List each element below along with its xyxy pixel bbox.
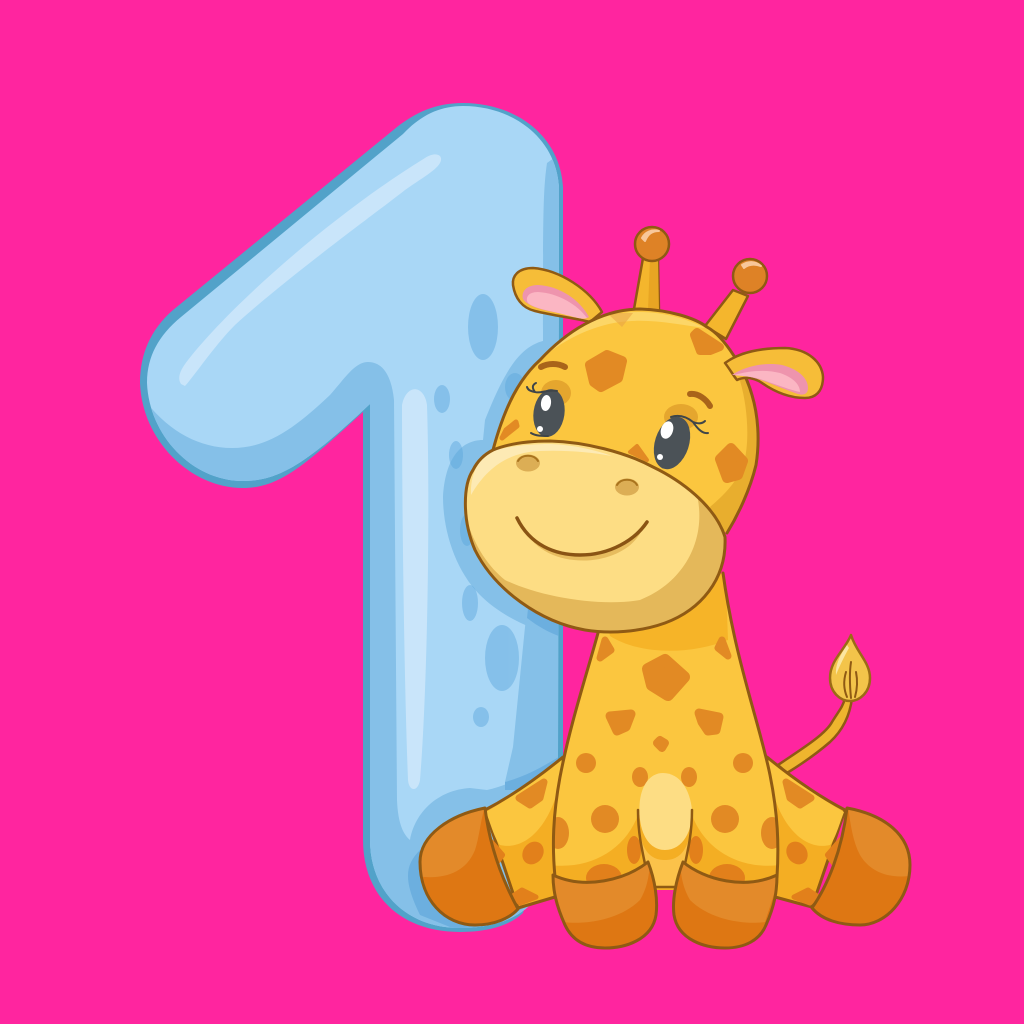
- body spots: [600, 640, 728, 748]
- front foot right: [672, 860, 778, 950]
- illustration: number one with baby giraffe: [140, 103, 912, 950]
- hoof right: [810, 806, 912, 926]
- body outline: [553, 573, 778, 877]
- muzzle: [464, 440, 727, 634]
- horn left: [634, 227, 669, 311]
- eyebrows: [541, 364, 565, 367]
- head right shade: [710, 379, 756, 532]
- giraffe: [410, 227, 920, 955]
- body and neck: [552, 572, 780, 890]
- number 1: [130, 90, 570, 940]
- left eye: [527, 383, 568, 439]
- horn right: [705, 259, 767, 339]
- halo behind head: [443, 341, 543, 625]
- shadow under arm and down stem: [152, 362, 528, 928]
- hind leg left: [485, 757, 569, 908]
- ear left: [513, 268, 602, 322]
- hoof shadow rim: [408, 850, 524, 928]
- hind leg right: [767, 757, 845, 907]
- tail: [778, 635, 870, 773]
- smile: [525, 528, 643, 561]
- spots on number: [434, 294, 525, 727]
- eyelid shade right: [664, 404, 698, 430]
- head top highlight: [550, 312, 704, 352]
- lower body shade: [556, 815, 776, 890]
- highlight: diagonal: [179, 154, 441, 386]
- right eye: [647, 412, 708, 474]
- head: [492, 308, 760, 535]
- front foot left: [552, 860, 658, 950]
- nostrils: [516, 454, 540, 472]
- under-chin shadow: [610, 573, 728, 651]
- eyelid shade left: [541, 380, 571, 406]
- ear right: [725, 348, 823, 398]
- hoof left: [418, 806, 520, 926]
- belly: [638, 810, 692, 887]
- shadow right side: [505, 160, 559, 782]
- head spots: [502, 332, 743, 478]
- highlight: vertical: [402, 389, 428, 789]
